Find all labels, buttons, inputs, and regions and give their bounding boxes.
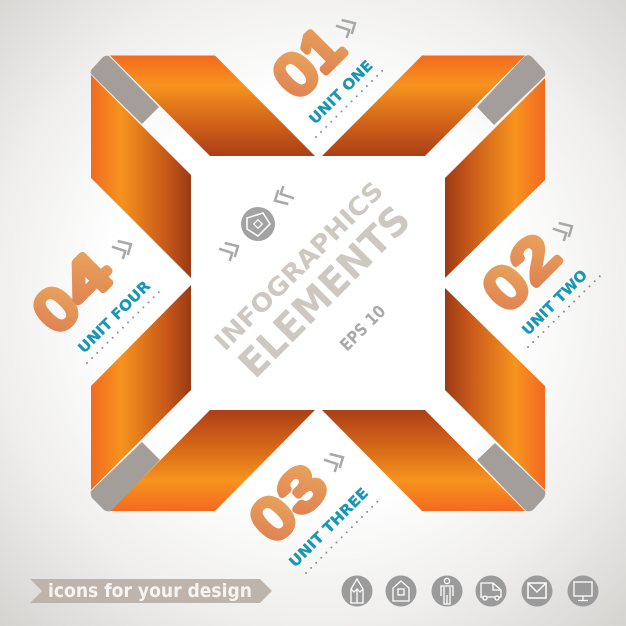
panel: unit two ribbon (445, 78, 545, 490)
dotted line (306, 501, 378, 573)
number 04: 4 (48, 241, 125, 318)
dotted line (528, 276, 600, 347)
icon: center house badge (241, 207, 275, 241)
text: EPS 10: EPS 10 (336, 302, 390, 356)
chevrons (112, 241, 131, 259)
number 04 (21, 241, 125, 345)
panel: unit one ribbon (110, 56, 525, 156)
callout: unit two (471, 223, 600, 347)
number 02: 0 (471, 253, 541, 323)
number 01: 1 (287, 15, 356, 84)
label UNIT FOUR: UNIT FOUR (76, 278, 154, 357)
panel: unit four ribbon (91, 75, 191, 490)
icon: monitor (568, 576, 598, 606)
chevrons (324, 454, 343, 472)
gray corner folds (91, 55, 545, 511)
ribbon bottom-right band (322, 410, 525, 511)
icon: person (432, 576, 462, 606)
dotted line (316, 66, 387, 137)
callout: unit one (261, 15, 387, 137)
number 01: 0 (261, 40, 331, 110)
number 03 (238, 453, 339, 554)
callout: unit four (21, 241, 159, 363)
icon: envelope (522, 576, 552, 606)
banner: icons for your design: icons for your design (48, 580, 252, 602)
icon: truck (476, 576, 506, 606)
icon: center chevrons lower (219, 243, 238, 261)
fold bottom-left (91, 442, 160, 511)
fold top-left (91, 56, 159, 124)
number 03: 3 (265, 453, 339, 527)
ribbon left-lower band (91, 285, 191, 490)
callout: unit three (238, 453, 378, 573)
heading: ELEMENTS: ELEMENTS (230, 198, 420, 387)
ribbon bottom-left band (110, 410, 315, 511)
label UNIT THREE: UNIT THREE (287, 485, 372, 571)
number 03: 0 (238, 484, 308, 554)
number 02 (471, 223, 571, 323)
icon row (342, 576, 598, 606)
ribbon left-upper band (91, 75, 191, 278)
fold top-right (477, 55, 545, 125)
ribbon top-left band (110, 56, 315, 156)
chevrons (336, 20, 355, 38)
label UNIT ONE: UNIT ONE (307, 58, 377, 128)
ribbon right-upper band (445, 78, 545, 278)
number 02: 2 (498, 223, 571, 296)
number 04: 0 (21, 275, 91, 345)
dotted line (87, 292, 159, 363)
label UNIT TWO: UNIT TWO (520, 267, 591, 339)
icon: pencil (342, 576, 372, 606)
ribbon top-right band (322, 56, 525, 156)
chevrons (553, 223, 572, 241)
icon: center chevrons upper (275, 186, 294, 204)
fold bottom-right (477, 443, 545, 511)
number 01 (261, 15, 356, 110)
panel: unit three ribbon (110, 410, 525, 511)
icon: house (386, 576, 416, 606)
heading: INFOGRAPHICS: INFOGRAPHICS (209, 176, 389, 356)
ribbon right-lower band (445, 288, 545, 490)
